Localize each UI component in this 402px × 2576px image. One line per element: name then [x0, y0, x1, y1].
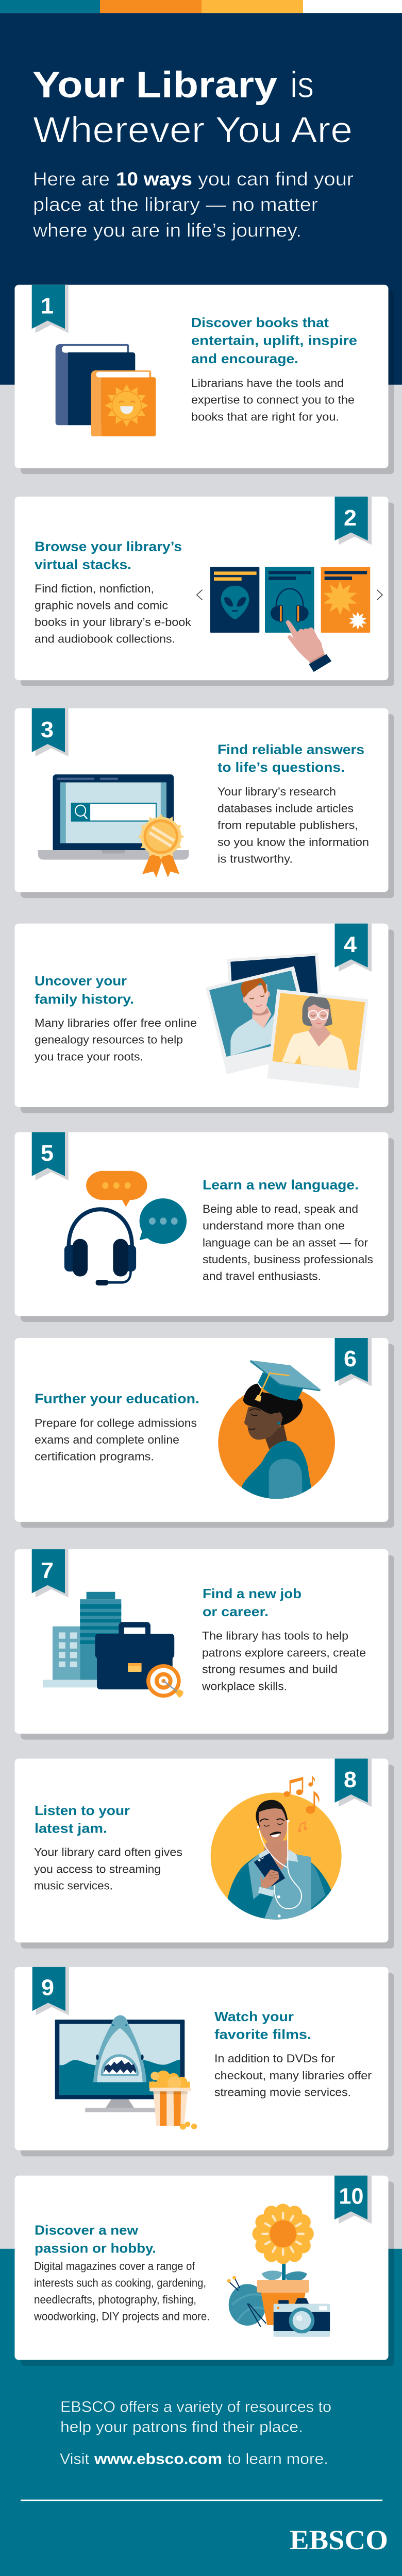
ribbon: number 1: 1	[41, 294, 54, 318]
footer text: to learn more.	[227, 2450, 328, 2467]
panel: item 8 latest jam	[14, 1758, 394, 1948]
text: item 5: language can be an asset — for	[203, 1236, 368, 1249]
background: white top strip	[0, 0, 402, 13]
text: item 6: exams and complete online	[35, 1433, 179, 1446]
intro text: Here are	[33, 168, 110, 190]
text: item 3: so you know the information	[217, 835, 369, 849]
text: item 2: virtual stacks.	[35, 557, 131, 572]
text: item 5: understand more than one	[203, 1219, 345, 1232]
footer text: EBSCO offers a variety of resources to	[60, 2398, 331, 2415]
text: item 9: In addition to DVDs for	[214, 2052, 335, 2065]
icon: e-book carousel with pointing hand	[197, 567, 382, 672]
text: item 1: Discover books that	[191, 315, 329, 330]
text: item 5	[203, 1177, 373, 1282]
title: is	[290, 64, 314, 106]
text: item 8	[34, 1803, 182, 1892]
footer text: www.ebsco.com	[94, 2450, 222, 2467]
text: item 9: favorite films.	[214, 2027, 311, 2042]
icon: family photographs	[206, 953, 368, 1088]
text: item 5: Being able to read, speak and	[203, 1202, 358, 1215]
ribbon: number 4: 4	[344, 932, 357, 957]
text: item 2: graphic novels and comic	[35, 599, 168, 612]
text: item 6: certification programs.	[35, 1450, 154, 1463]
text: item 1: and encourage.	[191, 351, 298, 366]
panel: item 10 passion or hobby	[14, 2176, 394, 2366]
text: item 10	[34, 2223, 210, 2323]
footer text	[60, 2398, 331, 2467]
icon: office buildings, briefcase and target	[43, 1592, 183, 1698]
ribbon: number 10	[334, 2176, 372, 2224]
panel: item 1 books	[14, 285, 394, 474]
text: item 4: you trace your roots.	[35, 1050, 143, 1063]
intro text	[32, 168, 354, 241]
text: item 8: Your library card often gives	[34, 1845, 182, 1859]
panel: item 5 new language	[14, 1132, 394, 1322]
ribbon: number 4	[335, 924, 372, 972]
ribbon: number 2	[335, 497, 372, 545]
text: item 3: databases include articles	[217, 802, 354, 815]
text: item 5: students, business professionals	[203, 1252, 373, 1266]
intro text: you can find your	[198, 168, 354, 190]
background: teal footer band	[0, 2249, 402, 2576]
text: item 2: Browse your library’s	[35, 539, 182, 554]
intro text: 10 ways	[116, 168, 192, 190]
ribbon: number 3	[32, 708, 69, 756]
title: Your Library	[32, 64, 278, 106]
intro text: place at the library — no matter	[33, 194, 318, 215]
text: item 6: Prepare for college admissions	[35, 1416, 197, 1430]
text: item 7: workplace skills.	[202, 1680, 287, 1693]
text: item 7	[202, 1586, 366, 1693]
ribbon: number 5	[32, 1132, 69, 1180]
text: item 8: Listen to your	[35, 1803, 130, 1818]
ribbon: number 7: 7	[41, 1558, 54, 1583]
text: item 1: entertain, uplift, inspire	[191, 333, 357, 348]
text: item 1	[191, 315, 357, 423]
icon: laptop with search bar and award seal	[38, 774, 189, 877]
text: item 7: patrons explore careers, create	[202, 1646, 366, 1659]
text: item 9: checkout, many libraries offer	[214, 2069, 372, 2082]
panel: item 4 family history	[14, 924, 394, 1113]
panel: item 3 reliable answers	[14, 708, 394, 898]
text: item 9	[214, 2009, 372, 2099]
text: item 3	[217, 742, 369, 865]
top colour bar	[0, 0, 303, 13]
text: item 7: strong resumes and build	[202, 1663, 338, 1676]
background: navy header band	[0, 13, 402, 385]
text: item 8: latest jam.	[35, 1821, 107, 1836]
text: item 3: Find reliable answers	[217, 742, 364, 757]
icon: flower pot, yarn and camera	[227, 2204, 330, 2337]
text: item 4: genealogy resources to help	[35, 1033, 183, 1046]
icon: music notes	[283, 1775, 320, 1833]
text: item 10: interests such as cooking, gardening,	[34, 2276, 206, 2289]
text: item 2: Find fiction, nonfiction,	[35, 582, 154, 595]
icon: shark movie on monitor with popcorn	[55, 2015, 197, 2130]
text: item 10: passion or hobby.	[35, 2241, 156, 2256]
text: item 1: Librarians have the tools and	[191, 376, 344, 389]
icon: man listening to music	[211, 1775, 342, 1920]
ribbon: number 9: 9	[41, 1975, 54, 2001]
text: item 7: or career.	[203, 1604, 269, 1619]
ribbon: number 3: 3	[41, 717, 54, 742]
text: item 7: The library has tools to help	[202, 1629, 348, 1642]
ribbon: number 8	[335, 1758, 372, 1807]
icon: graduate with mortarboard	[218, 1360, 335, 1499]
ribbon: number 5: 5	[41, 1141, 54, 1166]
ribbon: number 9	[32, 1967, 69, 2015]
panel: item 2 virtual stacks	[14, 497, 394, 686]
ribbon: number 6	[335, 1338, 372, 1386]
text: item 4	[35, 973, 197, 1063]
text: item 10: needlecrafts, photography, fishing,	[34, 2293, 196, 2306]
text: item 9: streaming movie services.	[214, 2086, 351, 2099]
text: item 10: Discover a new	[35, 2223, 138, 2238]
icon: two books with sun	[56, 344, 156, 436]
text: item 9: Watch your	[214, 2009, 294, 2024]
text: item 5: Learn a new language.	[203, 1177, 359, 1192]
text: item 3: from reputable publishers,	[217, 818, 358, 832]
panel: item 7 job or career	[14, 1549, 394, 1740]
text: item 6	[35, 1391, 199, 1463]
text: item 8: music services.	[34, 1879, 113, 1892]
ribbon: number 6: 6	[344, 1347, 357, 1371]
logo: EBSCO: EBSCO	[290, 2524, 388, 2555]
ribbon: number 1	[32, 285, 69, 333]
ribbon: number 7	[32, 1549, 69, 1598]
text: item 3: Your library’s research	[217, 785, 336, 798]
ribbon: number 10: 10	[339, 2184, 363, 2209]
footer text: Visit	[60, 2450, 90, 2467]
text: item 2	[35, 539, 192, 645]
text: item 7: Find a new job	[203, 1586, 301, 1601]
text: item 1: books that are right for you.	[191, 410, 339, 423]
text: item 10: woodworking, DIY projects and more.	[34, 2310, 210, 2323]
title: Wherever You Are	[33, 109, 353, 150]
ribbon: number 2: 2	[344, 505, 357, 531]
panel: item 6 further education	[14, 1338, 394, 1528]
text: item 2: books in your library’s e-book	[35, 615, 192, 629]
text: item 2: and audiobook collections.	[35, 632, 175, 645]
ribbon: number 8: 8	[344, 1767, 357, 1792]
text: item 3: to life’s questions.	[217, 760, 345, 775]
text: item 5: and travel enthusiasts.	[203, 1269, 321, 1282]
title	[32, 64, 353, 150]
panel: item 9 favorite films	[14, 1967, 394, 2156]
icon: headset with speech bubbles	[64, 1171, 187, 1285]
text: item 10: Digital magazines cover a range of	[34, 2259, 195, 2273]
intro text: where you are in life’s journey.	[32, 219, 301, 241]
text: item 4: Uncover your	[35, 973, 127, 988]
footer text: help your patrons find their place.	[60, 2418, 303, 2435]
text: item 3: is trustworthy.	[217, 852, 293, 865]
text: item 8: you access to streaming	[34, 1862, 161, 1875]
text: item 4: family history.	[35, 991, 134, 1007]
text: item 4: Many libraries offer free online	[35, 1016, 197, 1029]
text: item 1: expertise to connect you to the	[191, 393, 355, 406]
text: item 6: Further your education.	[35, 1391, 199, 1406]
